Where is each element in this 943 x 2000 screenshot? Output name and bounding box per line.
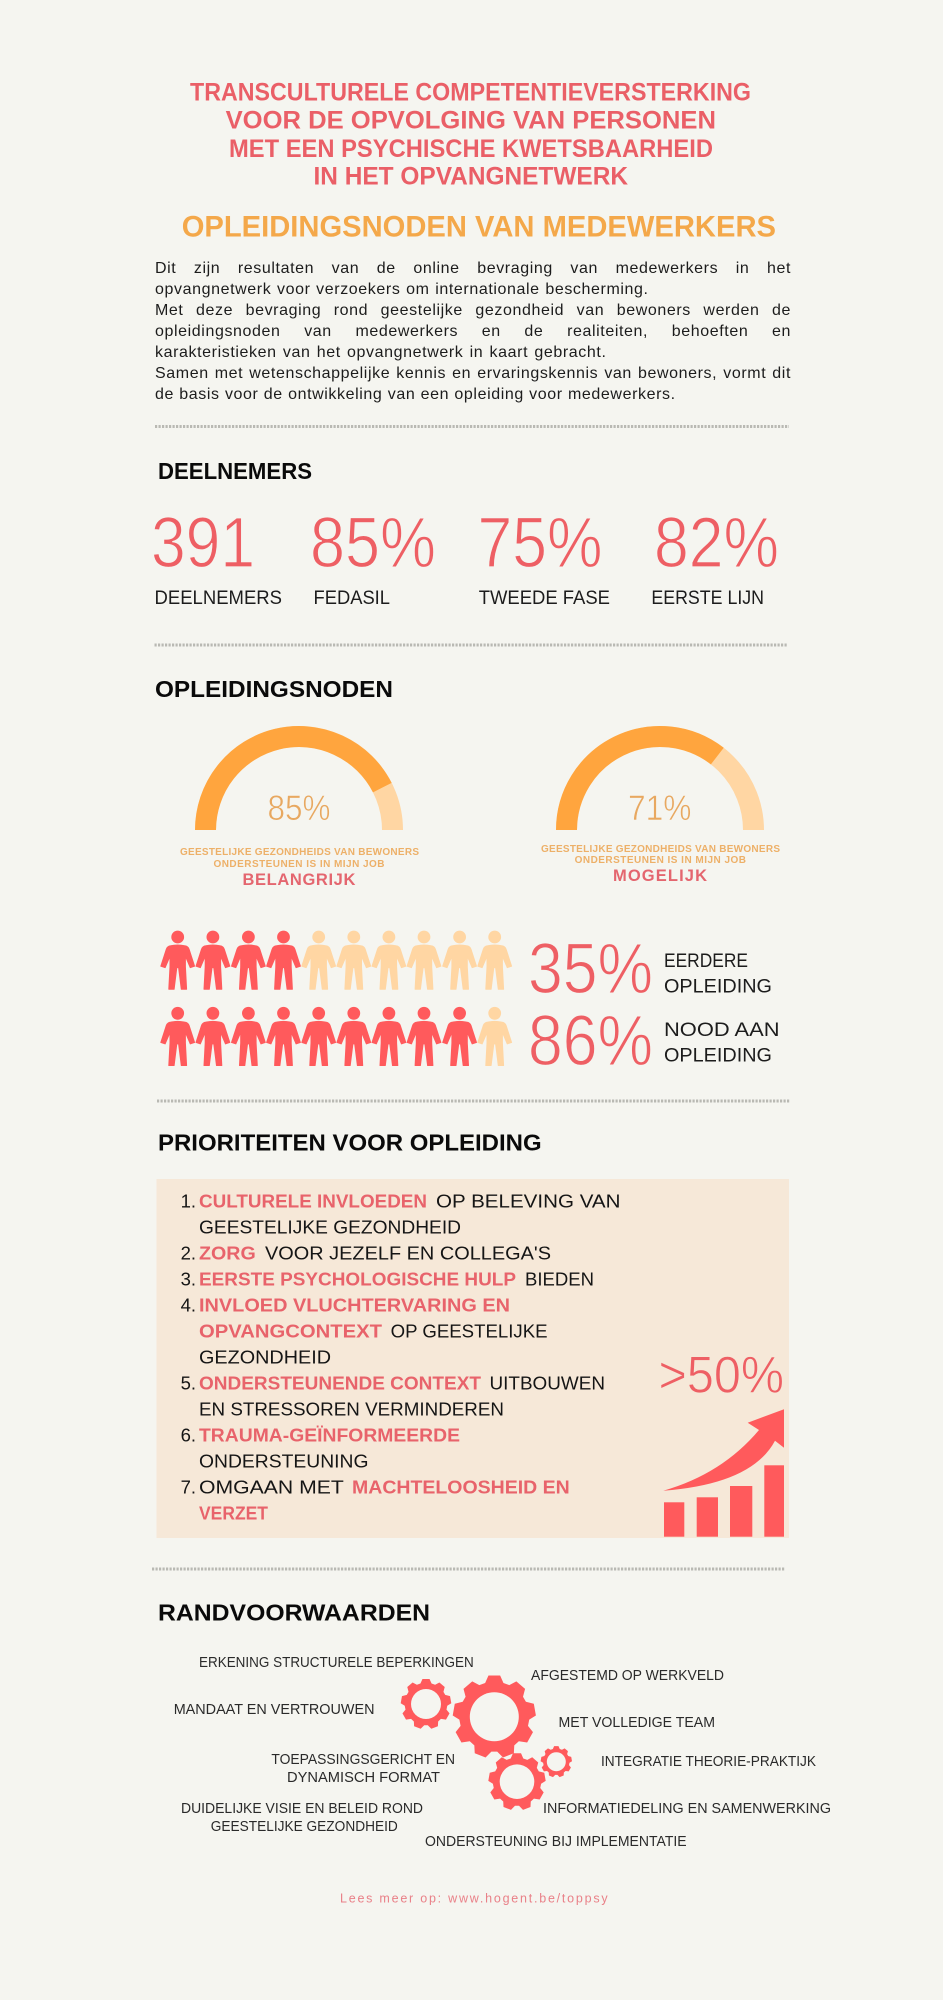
stat: 82% eerste lijn — [651, 504, 779, 609]
gauge: mogelijk 71%: 71% — [628, 789, 692, 828]
numbered list: TRAUMA-GEÏNFORMEERDE — [199, 1425, 460, 1446]
numbered list: VERZET — [199, 1503, 269, 1524]
heading: prioriteiten voor opleiding: PRIORITEITEN VOOR OPLEIDING — [158, 1130, 542, 1156]
numbered list — [181, 1191, 620, 1524]
numbered list: 5. — [181, 1373, 196, 1394]
numbered list: OP BELEVING VAN — [436, 1191, 620, 1212]
labels: randvoorwaarden: AFGESTEMD OP WERKVELD — [531, 1667, 724, 1684]
pictogram row: 86% nood aan opleiding — [161, 1002, 780, 1081]
heading: deelnemers: DEELNEMERS — [158, 458, 312, 484]
footer link: Lees meer op: www.hogent.be/toppsy — [340, 1892, 608, 1906]
numbered list: OP GEESTELIJKE — [391, 1321, 548, 1342]
pictogram row: 35% eerdere opleiding: OPLEIDING — [664, 977, 772, 998]
gauge: belangrijk 85%: ONDERSTEUNEN IS IN MIJN JOB — [214, 859, 384, 870]
numbered list: CULTURELE INVLOEDEN — [199, 1191, 427, 1212]
gauge: belangrijk 85% — [180, 736, 419, 889]
numbered list: 3. — [181, 1269, 196, 1290]
numbered list: 7. — [181, 1477, 196, 1498]
numbered list: EERSTE PSYCHOLOGISCHE HULP — [199, 1269, 516, 1290]
people icons: 9 of 10 filled — [161, 1007, 512, 1066]
labels: randvoorwaarden: ERKENING STRUCTURELE BEPERKINGEN — [199, 1654, 474, 1671]
panel: prioriteiten — [156, 1179, 789, 1538]
stat: 391 deelnemers: DEELNEMERS — [154, 588, 282, 609]
intro text: karakteristieken van het opvangnetwerk in kaart gebracht. — [155, 344, 606, 361]
icon: rising bars and arrow — [663, 1409, 784, 1537]
numbered list: GEESTELIJKE GEZONDHEID — [199, 1217, 461, 1238]
labels: randvoorwaarden: DUIDELIJKE VISIE EN BELEID ROND — [181, 1800, 423, 1817]
intro text: opleidingsnoden van medewerkers en de realiteiten, behoeften en — [155, 323, 791, 340]
section: deelnemers — [151, 458, 779, 609]
labels: randvoorwaarden: TOEPASSINGSGERICHT EN — [271, 1751, 455, 1768]
stat: 85% fedasil: 85% — [310, 504, 436, 583]
stat: 85% fedasil — [310, 504, 436, 609]
subtitle: OPLEIDINGSNODEN VAN MEDEWERKERS — [182, 210, 776, 244]
labels: randvoorwaarden: INTEGRATIE THEORIE-PRAKTIJK — [601, 1753, 816, 1770]
people icons: 4 of 10 filled — [161, 931, 512, 989]
gauge: belangrijk 85%: 85% — [268, 789, 330, 828]
numbered list: MACHTELOOSHEID EN — [352, 1477, 570, 1498]
icon: gears — [401, 1676, 572, 1810]
labels: randvoorwaarden: MET VOLLEDIGE TEAM — [558, 1714, 715, 1731]
title — [190, 79, 751, 191]
labels: randvoorwaarden: MANDAAT EN VERTROUWEN — [174, 1701, 374, 1718]
stat: 82% eerste lijn: 82% — [654, 504, 779, 583]
stat: 391 deelnemers: 391 — [151, 504, 255, 583]
intro text: Samen met wetenschappelijke kennis en ervaringskennis van bewoners, vormt dit — [155, 365, 791, 382]
labels: randvoorwaarden: INFORMATIEDELING EN SAMENWERKING — [543, 1800, 831, 1817]
gauge: belangrijk 85%: GEESTELIJKE GEZONDHEIDS VAN BEWONERS — [180, 847, 419, 858]
pictogram row: 35% eerdere opleiding: EERDERE — [664, 951, 748, 972]
numbered list: INVLOED VLUCHTERVARING EN — [199, 1295, 510, 1316]
title: MET EEN PSYCHISCHE KWETSBAARHEID — [229, 135, 713, 163]
callout: >50%: >50% — [658, 1347, 784, 1405]
stat: 85% fedasil: FEDASIL — [314, 588, 390, 609]
stat: 75% tweede fase: TWEEDE FASE — [479, 588, 610, 609]
intro text: opvangnetwerk voor verzoekers om internationale bescherming. — [155, 281, 649, 298]
heading: opleidingsnoden: OPLEIDINGSNODEN — [155, 676, 393, 702]
labels: randvoorwaarden: DYNAMISCH FORMAT — [287, 1769, 440, 1786]
gear: large — [453, 1676, 536, 1757]
numbered list: 6. — [181, 1425, 196, 1446]
pictogram row: 86% nood aan opleiding: OPLEIDING — [664, 1046, 772, 1067]
numbered list: 4. — [181, 1295, 196, 1316]
stat: 75% tweede fase: 75% — [478, 504, 602, 583]
labels: randvoorwaarden: ONDERSTEUNING BIJ IMPLEMENTATIE — [425, 1833, 687, 1850]
numbered list: UITBOUWEN — [490, 1373, 605, 1394]
intro text: Met deze bevraging rond geestelijke gezondheid van bewoners werden de — [155, 302, 791, 319]
numbered list: OPVANGCONTEXT — [199, 1321, 383, 1342]
title: TRANSCULTURELE COMPETENTIEVERSTERKING — [190, 79, 751, 107]
gauge: mogelijk 71%: ONDERSTEUNEN IS IN MIJN JOB — [575, 855, 746, 866]
numbered list: ONDERSTEUNENDE CONTEXT — [199, 1373, 482, 1394]
intro text: Dit zijn resultaten van de online bevraging van medewerkers in het — [155, 260, 791, 277]
numbered list: GEZONDHEID — [199, 1347, 331, 1368]
gauge: mogelijk 71% — [541, 736, 780, 885]
numbered list: EN STRESSOREN VERMINDEREN — [199, 1399, 504, 1420]
numbered list: ZORG — [199, 1243, 256, 1264]
gear: left — [401, 1679, 451, 1729]
gauge: mogelijk 71%: GEESTELIJKE GEZONDHEIDS VAN BEWONERS — [541, 844, 780, 855]
pictogram row: 35% eerdere opleiding: 35% — [528, 930, 653, 1009]
numbered list: ONDERSTEUNING — [199, 1451, 368, 1472]
title: IN HET OPVANGNETWERK — [314, 163, 628, 191]
pictogram row: 35% eerdere opleiding — [161, 930, 772, 1009]
gauge: mogelijk 71%: MOGELIJK — [613, 867, 707, 885]
gear: bottom — [488, 1753, 546, 1810]
numbered list: BIEDEN — [525, 1269, 594, 1290]
labels: randvoorwaarden: GEESTELIJKE GEZONDHEID — [211, 1818, 398, 1835]
intro text — [155, 260, 791, 403]
title: VOOR DE OPVOLGING VAN PERSONEN — [226, 107, 716, 135]
numbered list: VOOR JEZELF EN COLLEGA'S — [265, 1243, 551, 1264]
stat: 82% eerste lijn: EERSTE LIJN — [651, 588, 764, 609]
numbered list: OMGAAN MET — [199, 1477, 344, 1498]
numbered list: 1. — [181, 1191, 196, 1212]
intro text: de basis voor de ontwikkeling van een opleiding voor medewerkers. — [155, 386, 676, 403]
stat: 391 deelnemers — [151, 504, 282, 609]
pictogram row: 86% nood aan opleiding: NOOD AAN — [664, 1020, 780, 1041]
labels: randvoorwaarden — [174, 1654, 831, 1850]
pictogram row: 86% nood aan opleiding: 86% — [528, 1002, 653, 1081]
numbered list: 2. — [181, 1243, 196, 1264]
gauge: belangrijk 85%: BELANGRIJK — [242, 871, 355, 889]
heading: randvoorwaarden: RANDVOORWAARDEN — [158, 1600, 430, 1626]
gear: small — [541, 1746, 572, 1777]
